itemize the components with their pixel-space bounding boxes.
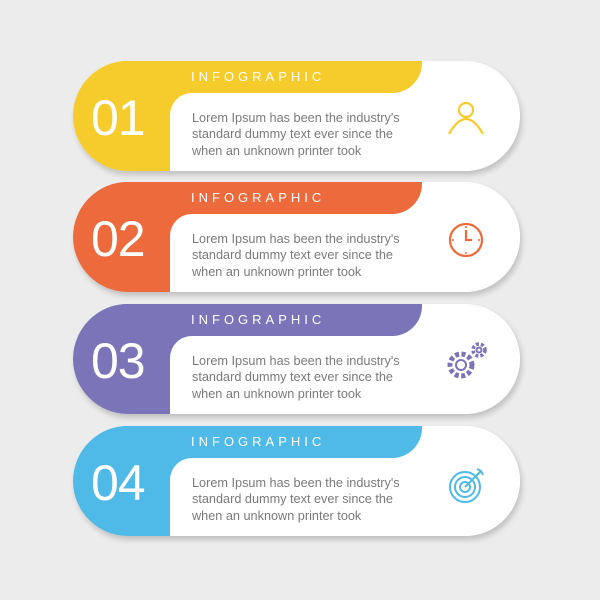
text 3: standard dummy text ever since the bbox=[192, 370, 393, 384]
text 2: Lorem Ipsum has been the industry's bbox=[192, 232, 400, 246]
text 2: standard dummy text ever since the bbox=[192, 248, 393, 262]
title 4: INFOGRAPHIC bbox=[191, 434, 325, 449]
text 3: when an unknown printer took bbox=[192, 387, 361, 401]
number 03: 03 bbox=[91, 333, 145, 389]
icon: gears bbox=[448, 342, 487, 378]
text 1: standard dummy text ever since the bbox=[192, 127, 393, 141]
number 04: 04 bbox=[91, 455, 145, 511]
title 3: INFOGRAPHIC bbox=[191, 312, 325, 327]
icon: person bbox=[448, 102, 484, 134]
icon: target bbox=[449, 468, 484, 503]
title 2: INFOGRAPHIC bbox=[191, 190, 325, 205]
card 4 bbox=[73, 426, 520, 536]
text 2 bbox=[192, 232, 400, 279]
number 01: 01 bbox=[91, 90, 145, 146]
text 1: Lorem Ipsum has been the industry's bbox=[192, 111, 400, 125]
card 3 bbox=[73, 304, 520, 414]
text 1 bbox=[192, 111, 400, 158]
text 1: when an unknown printer took bbox=[192, 144, 361, 158]
card 1 bbox=[73, 61, 520, 171]
icon: clock bbox=[448, 222, 484, 258]
card 2 bbox=[73, 182, 520, 292]
text 2: when an unknown printer took bbox=[192, 265, 361, 279]
text 3: Lorem Ipsum has been the industry's bbox=[192, 354, 400, 368]
number 02: 02 bbox=[91, 211, 145, 267]
text 4: when an unknown printer took bbox=[192, 509, 361, 523]
title 1: INFOGRAPHIC bbox=[191, 69, 325, 84]
text 4: Lorem Ipsum has been the industry's bbox=[192, 476, 400, 490]
text 4 bbox=[192, 476, 400, 523]
text 3 bbox=[192, 354, 400, 401]
text 4: standard dummy text ever since the bbox=[192, 492, 393, 506]
